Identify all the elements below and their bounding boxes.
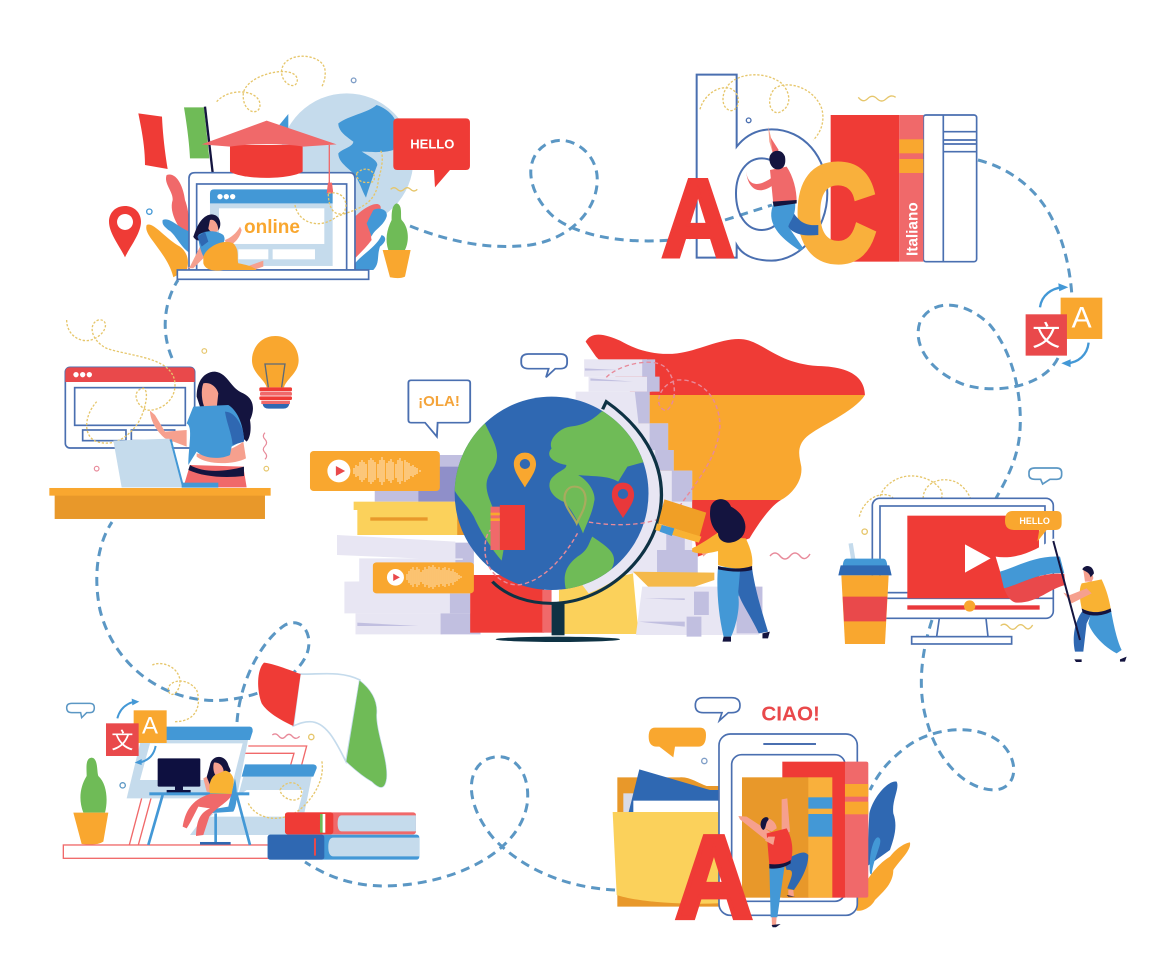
ring (120, 783, 125, 788)
translate icon: A (142, 712, 158, 739)
pink outline frame (129, 746, 307, 845)
globe stand (492, 402, 661, 642)
decorative swirl (67, 320, 175, 443)
web window (65, 367, 195, 448)
decorative swirl (859, 476, 973, 527)
decorative wave (1001, 624, 1033, 629)
Spanish flag shape (586, 335, 865, 557)
text: OLA: ¡OLA! (418, 393, 460, 410)
pink dashed swirl (485, 362, 720, 585)
bubble outline (67, 703, 94, 718)
decorative wave (391, 188, 417, 191)
man with flag (1053, 541, 1127, 662)
book stack left (337, 455, 481, 634)
icon: lightbulb (252, 336, 299, 409)
folder (613, 769, 720, 907)
graduation cap (202, 121, 337, 193)
scene: online course (109, 56, 470, 279)
decorative wave: center (770, 553, 810, 559)
letter C: C (797, 139, 875, 288)
book: Italiano (831, 115, 977, 262)
bubble: HELLO: HELLO (1019, 516, 1050, 526)
monitor (872, 498, 1053, 644)
plants behind laptop (146, 175, 387, 277)
ring (862, 529, 867, 534)
audio message 2 (373, 562, 474, 593)
gold swirl (248, 760, 322, 818)
speech bubble orange (649, 728, 706, 757)
dashed route connecting scenes (97, 140, 1072, 890)
potted plant (383, 203, 411, 278)
decorative swirl over globe (295, 150, 382, 224)
Russian flag (996, 538, 1065, 603)
letter A: A (675, 812, 753, 944)
book: Italiano: Italiano (904, 202, 921, 256)
scene: phone with books (613, 698, 910, 944)
audio wave 1 (354, 457, 420, 485)
decorative swirl (152, 664, 198, 722)
desk (49, 488, 271, 519)
laptop (113, 439, 218, 488)
second window (190, 764, 317, 835)
audio message 1 (310, 451, 440, 491)
scene: remote workspace (63, 663, 419, 860)
globe body (452, 397, 660, 593)
woman carrying box (655, 499, 770, 642)
central scene: globe, books, Spain flag (310, 335, 865, 642)
speech bubble outline (521, 354, 567, 377)
book on globe (491, 505, 525, 550)
yellow crate and papers (559, 572, 762, 637)
climbing figure (746, 127, 818, 251)
shelf (63, 845, 277, 858)
laptop with online course (177, 173, 369, 279)
translate icon (106, 699, 167, 765)
letter b outline (697, 75, 827, 261)
icon: translate: 文 (1032, 321, 1060, 352)
books in phone (742, 762, 868, 898)
Italian flag wave (258, 663, 387, 787)
letter A: A (661, 156, 735, 280)
scene: video course (838, 468, 1127, 662)
speech bubble: HELLO: HELLO (410, 137, 454, 152)
decorative wave and rings (94, 349, 269, 471)
ring (746, 118, 751, 123)
pins on globe (514, 453, 634, 523)
cup (838, 543, 892, 644)
potted plant (73, 758, 108, 845)
icon: decorative swirl (217, 56, 325, 112)
icon: wave (858, 96, 896, 101)
icon: translate: A (1072, 302, 1092, 335)
speech bubble: HELLO (393, 118, 470, 187)
decorative swirl (700, 75, 823, 140)
bubble outline (1029, 468, 1062, 484)
scene: alphabet and Italian book (661, 75, 1102, 367)
text: CIAO: CIAO! (761, 703, 820, 726)
bubble: HELLO (1005, 511, 1062, 542)
laptop with online course: online (244, 217, 300, 238)
desk and monitor (148, 758, 250, 845)
icon: Italian flag (138, 107, 213, 173)
yellow box (354, 502, 465, 535)
icon: location pin (109, 206, 141, 257)
stacked books (268, 812, 419, 860)
audio wave 2 (407, 565, 461, 589)
globe (279, 93, 413, 227)
woman sitting on laptop (187, 214, 263, 271)
translate icon: 文 (111, 729, 133, 754)
phone (719, 734, 857, 915)
red box (470, 575, 552, 633)
decorative wave and ring (272, 734, 314, 740)
scene: woman with laptop and lightbulb (49, 320, 299, 519)
speech bubble: OLA (408, 380, 470, 437)
small rings (147, 78, 356, 214)
woman (150, 372, 253, 487)
icon: translate (1026, 283, 1102, 367)
man jumping (738, 798, 808, 927)
back window (127, 727, 253, 798)
plant (857, 782, 910, 911)
ring (702, 758, 707, 764)
speech bubble outline (695, 698, 740, 721)
woman on chair (183, 757, 237, 845)
paper stack behind (576, 359, 698, 573)
